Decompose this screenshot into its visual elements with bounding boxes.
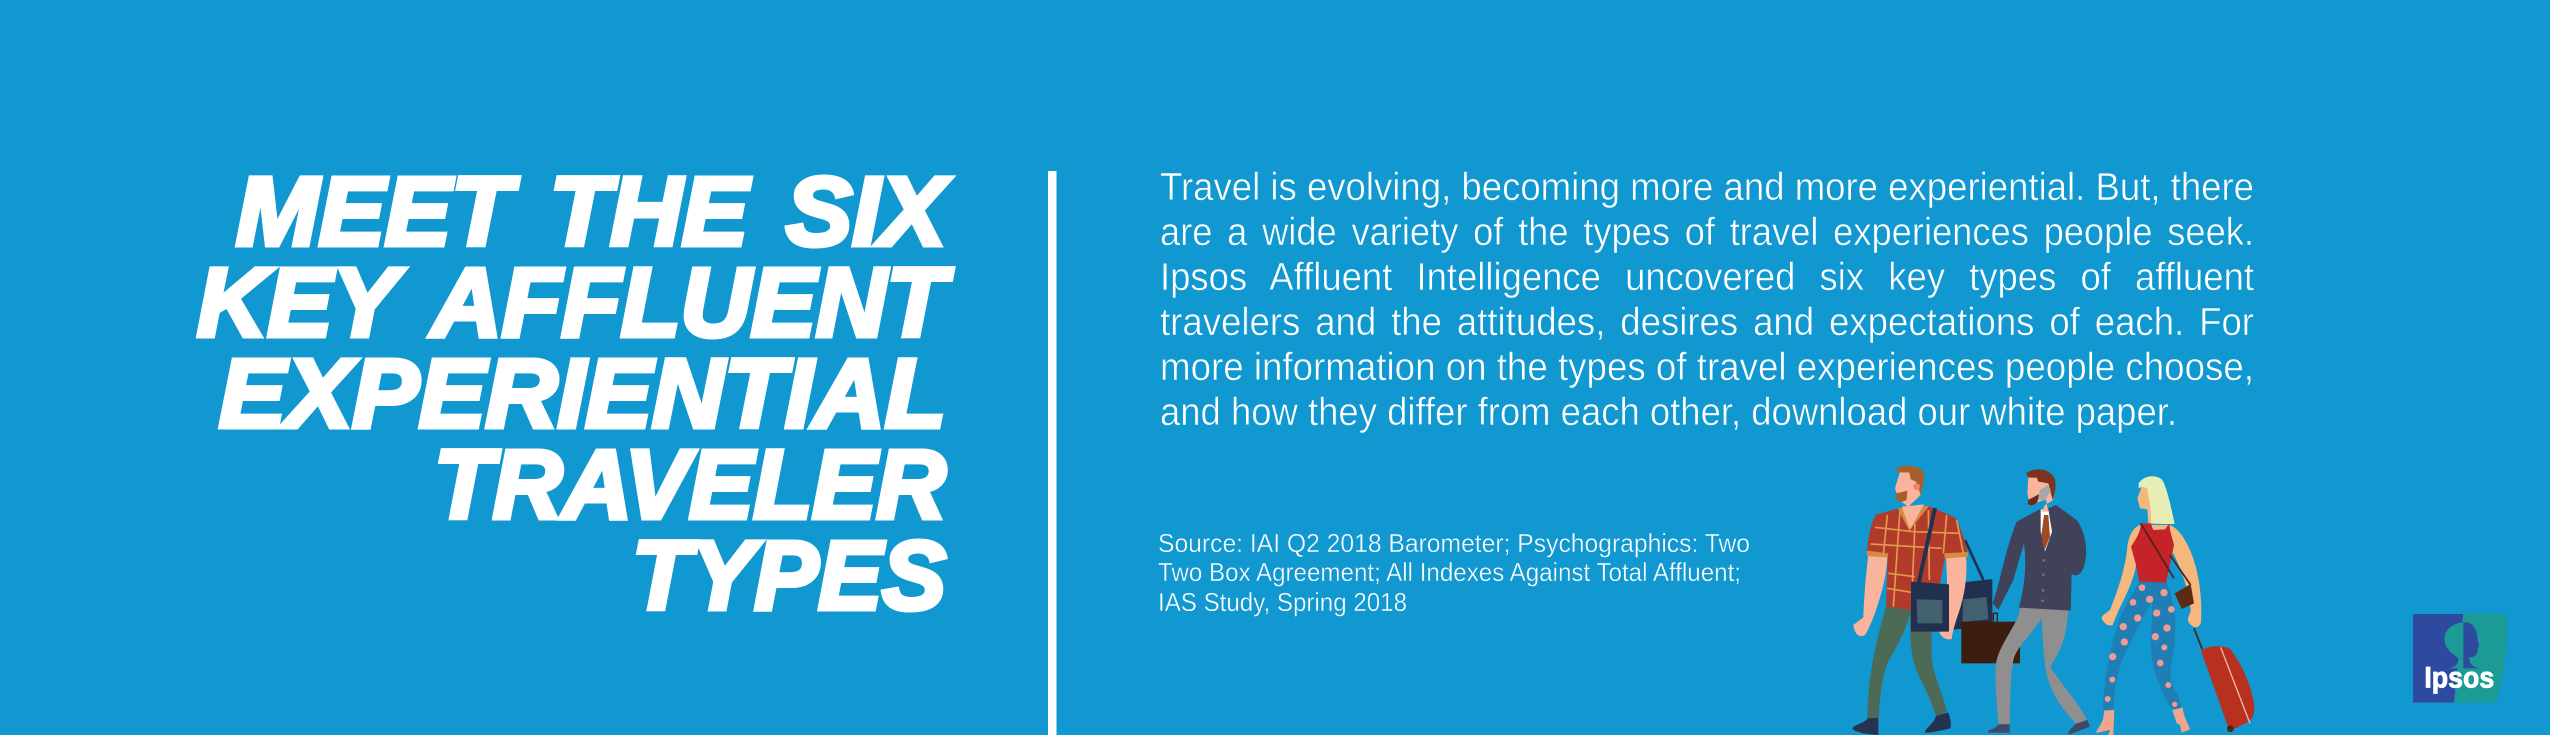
title: KEY AFFLUENT xyxy=(197,248,954,357)
intro paragraph: Travel is evolving, becoming more and more experiential. But, there xyxy=(1160,166,2254,209)
woman with suitcase xyxy=(2096,476,2254,735)
title: EXPERIENTIAL xyxy=(219,339,946,448)
man in suit with briefcase and phone xyxy=(1961,469,2090,735)
source note: Source: IAI Q2 2018 Barometer; Psychographics: Two xyxy=(1158,528,1750,558)
title: TRAVELER xyxy=(434,430,946,539)
intro paragraph: Ipsos Affluent Intelligence uncovered six key types of affluent xyxy=(1160,256,2254,299)
title xyxy=(197,157,954,630)
intro paragraph xyxy=(1160,166,2254,434)
source note xyxy=(1158,528,1750,617)
logo wordmark: Ipsos xyxy=(2424,662,2494,695)
man with plaid shirt and bag xyxy=(1853,466,1992,735)
intro paragraph: and how they differ from each other, download our white paper. xyxy=(1160,391,2177,434)
intro paragraph: travelers and the attitudes, desires and expectations of each. For xyxy=(1160,301,2254,344)
intro paragraph: are a wide variety of the types of travel experiences people seek. xyxy=(1160,211,2254,254)
source note: Two Box Agreement; All Indexes Against Total Affluent; xyxy=(1158,557,1741,587)
illustration: three travelers xyxy=(1853,466,2254,735)
title: MEET THE SIX xyxy=(236,157,951,266)
source note: IAS Study, Spring 2018 xyxy=(1158,587,1407,617)
title: TYPES xyxy=(632,521,946,630)
intro paragraph: more information on the types of travel experiences people choose, xyxy=(1160,346,2254,389)
vertical divider xyxy=(1048,171,1056,735)
icon: Ipsos logo xyxy=(2413,614,2507,703)
